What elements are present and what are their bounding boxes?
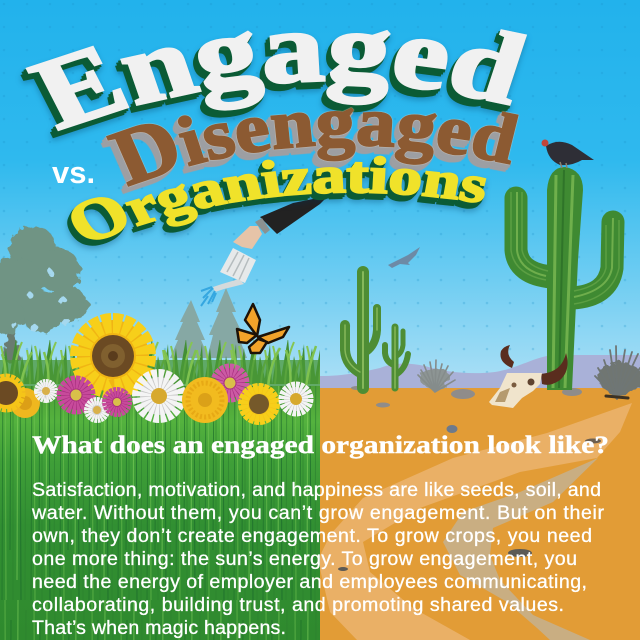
large sunflower [77,320,149,392]
small rocks [338,386,601,571]
body text [31,479,604,639]
sunflower: small [241,386,277,422]
butterfly [237,304,289,353]
body text: need the energy of employer and employees communicating, [32,571,587,593]
flower: yellow, far left [10,388,40,418]
pink flower [106,391,128,413]
title: Disengaged: Disengaged [100,107,520,194]
body text: one more thing: the sun’s energy. To grow engagement, you [32,548,577,570]
tree [0,226,91,362]
daisy: white right [284,387,308,411]
grass field [0,340,320,640]
body text: Satisfaction, motivation, and happiness are like seeds, soil, and [32,479,601,501]
cactus: large [511,167,619,390]
cow skull [489,345,568,408]
pink flower [215,368,245,398]
body text: own, they don’t create engagement. To grow crops, you need [32,525,592,547]
title: Organizations: Organizations [64,156,488,252]
bush [595,346,640,399]
desert ground [320,388,640,640]
flying bird [388,247,420,268]
body text: collaborating, building trust, and promoting shared values. [32,594,564,616]
sky background [0,0,640,400]
cactus: small [385,327,408,388]
cactus: medium [345,272,377,388]
fir trees [170,288,247,358]
arm and watering can [201,196,328,306]
daisy: small white [88,401,106,419]
body text: That’s when magic happens. [32,617,286,639]
body text: water. Without them, you can’t grow engagement. But on their [31,502,604,524]
sunflower: far left [0,377,22,409]
bush [418,360,455,392]
yellow flower [182,377,228,423]
title: vs.: vs. [52,155,95,190]
pink flower [61,380,91,410]
heading: What does an engaged organization look like? [32,432,609,459]
vulture on cactus [542,140,594,168]
mountains [320,355,640,392]
big white daisy [140,377,178,415]
road [318,403,632,640]
daisy: small white left [37,382,55,400]
